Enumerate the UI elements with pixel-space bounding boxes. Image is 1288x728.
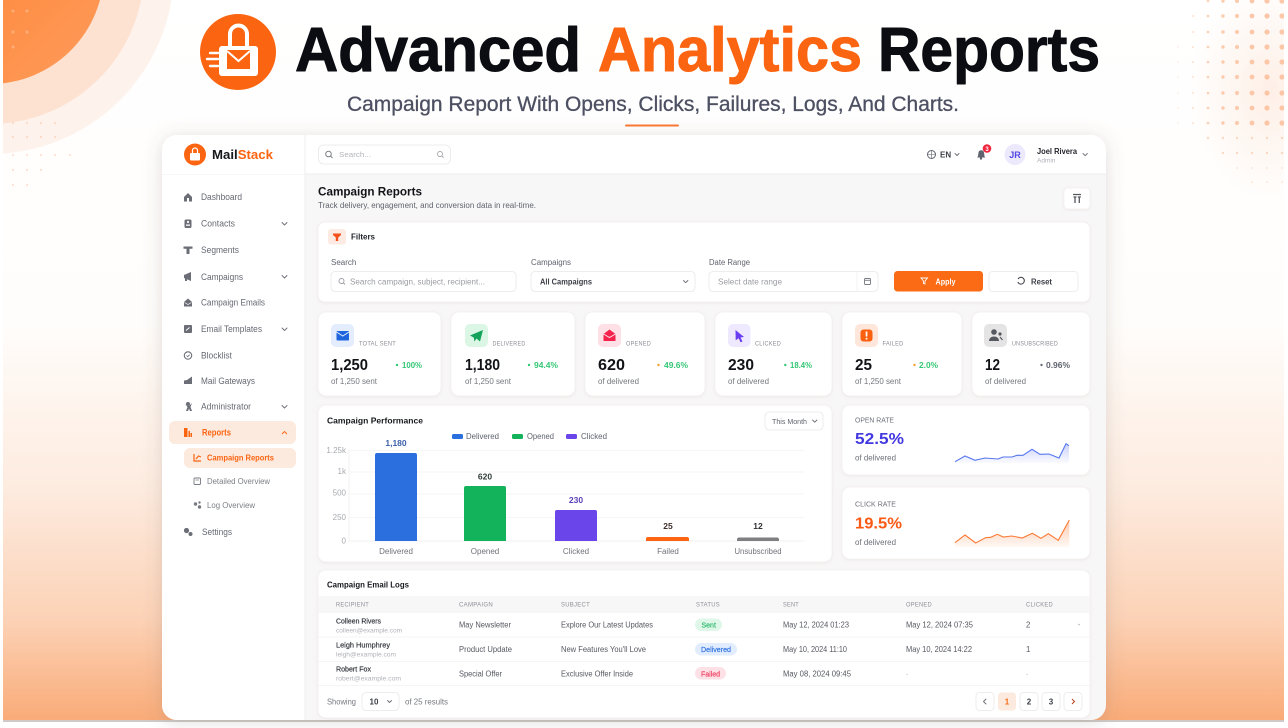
stat card: failed <box>842 312 962 396</box>
nav: Log Overview: Log Overview <box>207 501 255 510</box>
table row: Colleen Rivers <box>336 616 1080 634</box>
panel: click rate <box>842 487 1090 559</box>
table footer: page size <box>327 692 448 710</box>
nav: Campaign Emails: Campaign Emails <box>201 298 265 308</box>
x axis labels <box>379 547 782 556</box>
table row: Robert Fox: Special Offer <box>459 669 502 678</box>
stat card: clicked <box>715 312 832 396</box>
nav: Segments <box>184 245 239 255</box>
apply button <box>894 271 983 292</box>
stat card: unsubscribed: 0.96% <box>1046 361 1070 370</box>
nav: Contacts: Contacts <box>201 218 235 228</box>
period dropdown <box>765 412 823 430</box>
title: Reports <box>878 16 1100 85</box>
nav: Campaigns: Campaigns <box>201 272 243 282</box>
table row: Robert Fox: robert@example.com <box>336 676 401 683</box>
stat card: opened: 620 <box>598 357 625 374</box>
nav: Email Templates <box>184 324 287 334</box>
table header: RECIPIENT <box>336 602 369 608</box>
table row: Leigh Humphrey: leigh@example.com <box>336 652 396 659</box>
sidebar logo: MailStack <box>212 147 274 162</box>
top bar right: language, notifications, user: 3 <box>985 147 989 153</box>
stat card: failed: FAILED <box>882 340 904 348</box>
pagination: 1 <box>1005 698 1010 706</box>
nav: Administrator: Administrator <box>201 402 251 412</box>
top bar right: language, notifications, user: EN <box>940 150 951 160</box>
table row: Robert Fox: Robert Fox <box>336 665 371 674</box>
top bar right: language, notifications, user: Joel Rivera <box>1037 147 1078 156</box>
stat card: clicked: of delivered <box>728 377 769 386</box>
nav: Settings <box>184 527 232 537</box>
table row: Colleen Rivers: May Newsletter <box>459 620 511 629</box>
nav: Reports active <box>169 421 296 444</box>
stat card: unsubscribed: of delivered <box>985 377 1026 386</box>
search field <box>331 258 516 292</box>
stat card: failed: of 1,250 sent <box>855 377 902 386</box>
panel: click rate: of delivered <box>855 538 896 547</box>
date range field: Select date range <box>718 278 782 286</box>
nav: Campaign Reports active: Campaign Reports <box>207 454 275 462</box>
stat card: total sent: 1,250 <box>331 357 368 374</box>
pagination: 3 <box>1049 698 1054 706</box>
table row: Colleen Rivers: Colleen Rivers <box>336 616 381 626</box>
bar values <box>385 438 763 531</box>
page heading: Campaign Reports <box>318 184 422 198</box>
table header: SUBJECT <box>561 602 590 608</box>
table row: Colleen Rivers: Sent <box>702 622 716 629</box>
subtitle: Campaign Report With Opens, Clicks, Failures, Logs, And Charts. <box>347 93 959 116</box>
table row: Leigh Humphrey: May 10, 2024 11:10 <box>783 645 848 654</box>
panel: click rate: 19.5% <box>855 516 902 532</box>
legend <box>452 432 607 441</box>
y axis labels: 0 <box>342 536 347 546</box>
title: Analytics <box>598 16 862 85</box>
y axis labels: 1k <box>338 467 347 476</box>
campaigns field: Campaigns <box>531 258 571 267</box>
stat card: unsubscribed: UNSUBSCRIBED <box>1012 340 1058 348</box>
title: Advanced <box>295 16 581 85</box>
apply button: Apply <box>936 277 956 286</box>
top search box <box>318 145 450 164</box>
stat card: opened: OPENED <box>626 340 651 348</box>
search field: Search campaign, subject, recipient... <box>350 278 485 286</box>
period dropdown: This Month <box>772 417 807 426</box>
brand logo: lock with envelope <box>200 14 276 90</box>
table footer: page size: Showing <box>327 697 356 706</box>
stat card: failed: 25 <box>855 357 872 374</box>
nav: Reports active: Reports <box>202 428 231 438</box>
stat card: total sent: of 1,250 sent <box>331 377 378 386</box>
sidebar logo <box>184 144 274 166</box>
table row: Colleen Rivers: May 12, 2024 07:35 <box>906 620 974 629</box>
table row: Colleen Rivers: May 12, 2024 01:23 <box>783 620 849 629</box>
nav: Blocklist: Blocklist <box>201 350 232 360</box>
stat card: opened: 49.6% <box>664 361 688 370</box>
y axis labels: 1.25k <box>326 446 347 455</box>
table footer: page size: 10 <box>370 698 379 706</box>
icon: filter <box>328 229 346 244</box>
stat card: total sent: 100% <box>402 361 422 370</box>
panel: open rate: of delivered <box>855 454 896 462</box>
table row: Robert Fox: Exclusive Offer Inside <box>561 669 633 678</box>
reset button: Reset <box>1031 277 1052 286</box>
panel: filters <box>318 222 1090 302</box>
page heading <box>318 184 536 210</box>
legend: Delivered <box>466 432 499 441</box>
table row: Robert Fox: May 08, 2024 09:45 <box>783 669 852 678</box>
table row: Robert Fox: - <box>1026 671 1028 678</box>
nav: Dashboard: Dashboard <box>201 192 242 202</box>
stat card: clicked: 230 <box>728 357 754 374</box>
page heading: Track delivery, engagement, and conversion data in real-time. <box>318 201 536 210</box>
nav: Campaign Reports active <box>184 448 296 468</box>
stat card: opened: of delivered <box>598 377 639 386</box>
top search box: Search... <box>339 150 371 159</box>
panel: open rate: OPEN RATE <box>855 416 894 424</box>
table header: SENT <box>783 602 799 608</box>
campaigns field: All Campaigns <box>540 278 593 286</box>
y axis labels: 500 <box>333 488 347 498</box>
stat card: delivered: 1,180 <box>465 357 500 374</box>
reset button <box>989 272 1078 292</box>
nav: Detailed Overview: Detailed Overview <box>207 477 270 486</box>
table header: STATUS <box>696 602 720 608</box>
x axis labels: Failed <box>657 547 679 556</box>
search field: Search <box>331 258 356 267</box>
table row: Robert Fox <box>336 665 1028 683</box>
bar values: 25 <box>663 521 673 531</box>
legend: Opened <box>527 432 554 441</box>
title <box>295 16 1100 85</box>
sidebar <box>169 144 296 537</box>
stat card: unsubscribed: 12 <box>985 357 1000 374</box>
nav: Mail Gateways: Mail Gateways <box>201 376 255 386</box>
table row: Colleen Rivers: Explore Our Latest Updates <box>561 620 653 629</box>
x axis labels: Delivered <box>379 547 413 556</box>
table row: Leigh Humphrey <box>336 641 1030 659</box>
x axis labels: Clicked <box>563 547 589 556</box>
legend: Clicked <box>581 432 607 441</box>
nav: Contacts <box>184 218 287 228</box>
pagination: 2 <box>1027 698 1032 706</box>
sparkline: open rate <box>955 444 1069 463</box>
stat card: failed: 2.0% <box>919 361 938 370</box>
stat card: opened <box>585 312 705 396</box>
y axis labels <box>326 446 347 546</box>
table header: CLICKED <box>1026 602 1053 608</box>
table row: Robert Fox: Failed <box>701 671 720 678</box>
table row: Leigh Humphrey: Leigh Humphrey <box>336 641 390 650</box>
date range field: Date Range <box>709 258 751 267</box>
panel: click rate: CLICK RATE <box>855 500 896 508</box>
chart title: Campaign Performance <box>327 416 423 426</box>
stat card: delivered: 94.4% <box>534 361 558 370</box>
table row: Robert Fox: - <box>906 671 908 678</box>
table row: Colleen Rivers: colleen@example.com <box>336 628 402 634</box>
top bar right: language, notifications, user: Admin <box>1037 158 1056 164</box>
x axis labels: Opened <box>471 547 499 556</box>
date range field <box>709 258 878 292</box>
logs heading: Campaign Email Logs <box>327 580 409 590</box>
bars <box>375 453 779 541</box>
table row: Leigh Humphrey: Product Update <box>459 645 512 654</box>
nav: Campaigns <box>184 272 287 282</box>
stat card: total sent: TOTAL SENT <box>359 340 396 348</box>
nav: Blocklist <box>184 350 232 360</box>
panel: open rate: 52.5% <box>855 431 904 448</box>
table header: OPENED <box>906 602 932 608</box>
x axis labels: Unsubscribed <box>734 547 782 556</box>
table footer: page size: of 25 results <box>405 697 448 706</box>
stat card: clicked: CLICKED <box>755 340 781 348</box>
panel: open rate <box>842 405 1090 475</box>
nav: Email Templates: Email Templates <box>201 324 262 334</box>
table row: Leigh Humphrey: 1 <box>1026 645 1030 654</box>
panel: campaign performance chart <box>318 405 832 562</box>
panel: campaign email logs <box>318 570 1090 718</box>
stat card: unsubscribed <box>972 312 1090 396</box>
stat card: total sent <box>318 312 441 396</box>
table row: Leigh Humphrey: New Features You'll Love <box>561 645 646 654</box>
sparkline: click rate <box>955 520 1069 547</box>
table row: Colleen Rivers: 2 <box>1026 620 1030 629</box>
nav: Administrator <box>184 402 287 412</box>
y axis labels: 250 <box>333 513 347 522</box>
top bar right: language, notifications, user: JR <box>1009 150 1021 160</box>
pagination <box>976 692 1082 710</box>
stat card: delivered: DELIVERED <box>492 340 526 348</box>
campaigns field <box>531 258 695 292</box>
nav: Dashboard <box>184 192 242 202</box>
bar values: 620 <box>478 472 492 482</box>
column settings button <box>1064 188 1090 209</box>
stat card: delivered <box>451 312 575 396</box>
stat card: clicked: 18.4% <box>790 361 812 370</box>
bar values: 230 <box>569 495 583 505</box>
bar values: 1,180 <box>385 438 407 448</box>
table header: CAMPAIGN <box>459 602 493 608</box>
nav: Settings: Settings <box>202 527 232 537</box>
stat card: delivered: of 1,250 sent <box>465 377 512 386</box>
table header <box>336 602 1053 608</box>
table row: Leigh Humphrey: Delivered <box>701 647 731 654</box>
nav: Segments: Segments <box>201 245 239 255</box>
panel: filters: Filters <box>351 232 376 242</box>
table row: Leigh Humphrey: May 10, 2024 14:22 <box>906 645 972 654</box>
bar values: 12 <box>753 521 763 531</box>
dashboard panel <box>162 135 1106 720</box>
top bar right: language, notifications, user <box>928 144 1087 165</box>
subtitle underline <box>625 124 679 126</box>
